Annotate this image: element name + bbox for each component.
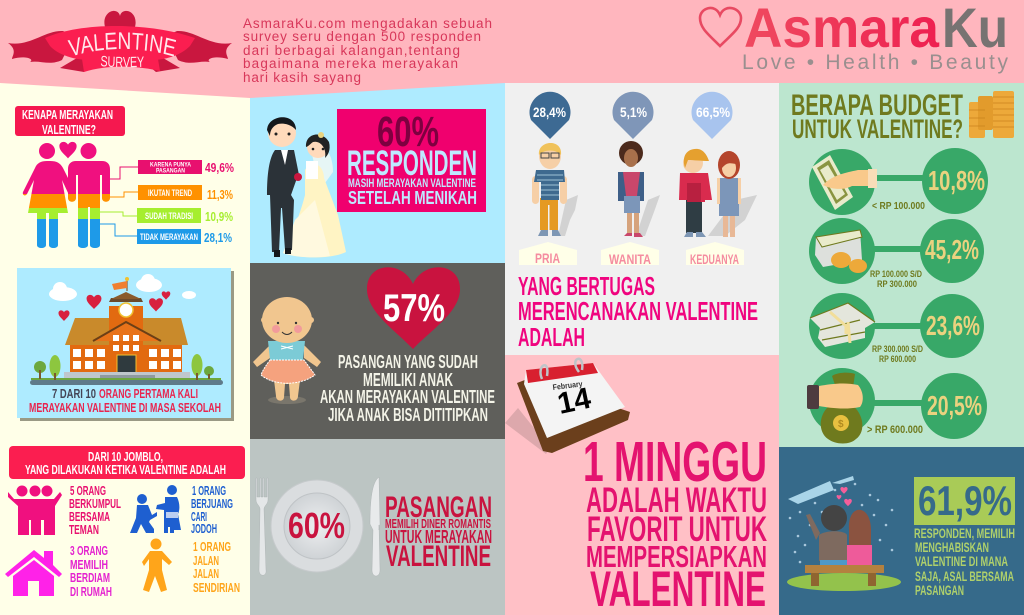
- pin: 28,4: [530, 92, 570, 139]
- heading: yang bertugas: YANG BERTUGAS: [518, 271, 655, 301]
- section: kenapa merayakan: VALENTINE?: [42, 122, 96, 137]
- panel: navy couple: [779, 447, 1024, 615]
- text: pasangan diner: MEMILIH DINER ROMANTIS: [385, 517, 491, 531]
- illustration: plate and cutlery: [256, 477, 380, 576]
- text: 1 orang berjuang: CARI: [191, 509, 207, 524]
- icon: calendar: 14: [555, 382, 594, 421]
- section: kenapa merayakan: KENAPA MERAYAKAN: [22, 107, 113, 122]
- icon: clouds: [49, 274, 196, 301]
- intro text: bagaimana mereka merayakan: [243, 56, 458, 71]
- row: budget 45,2: RP 300.000: [877, 279, 917, 290]
- pin: 28,4: 28,4%: [533, 104, 566, 120]
- text: responden memilih: PASANGAN: [915, 582, 964, 598]
- text: 1 minggu: [583, 430, 767, 615]
- illustration: wedding couple: [267, 117, 346, 257]
- text: 5 orang: 5 ORANG: [70, 483, 106, 498]
- pin: 66,5: 66,5%: [696, 104, 730, 120]
- illustration: plate and cutlery: 60%: [288, 505, 345, 546]
- text: pasangan yang sudah: [320, 352, 495, 425]
- text: responden memilih: [914, 525, 1015, 598]
- bar: karena punya pasangan: KARENA PUNYA: [150, 162, 191, 168]
- text: 5 orang: TEMAN: [69, 522, 99, 537]
- text: 1 orang jalan: 1 ORANG: [193, 539, 231, 554]
- bar: karena punya pasangan: PASANGAN: [156, 168, 185, 174]
- icon: fork: [256, 478, 268, 575]
- panel: planner light grey: [505, 83, 779, 355]
- illustration: baby: [253, 297, 321, 404]
- bar: sudah tradisi: 10,9%: [205, 209, 233, 224]
- label: keduanya: [686, 242, 744, 267]
- heading: yang bertugas: MERENCANAKAN VALENTINE: [518, 296, 758, 326]
- heading box: [15, 106, 125, 136]
- label: keduanya: KEDUANYA: [690, 251, 739, 267]
- panel: children dark grey: [250, 263, 505, 439]
- text: 3 orang: BERDIAM: [70, 570, 110, 585]
- callout: 57 percent heart: 57%: [383, 287, 445, 330]
- icon: school building: [30, 277, 223, 385]
- panel: header: [0, 0, 1024, 98]
- panel: budget green: [779, 83, 1024, 447]
- icon: friends: [8, 486, 62, 535]
- text: pasangan yang sudah: PASANGAN YANG SUDAH: [338, 352, 478, 372]
- label: pria: [519, 242, 577, 266]
- row: budget 10,8: 10,8%: [928, 165, 985, 196]
- icon: coins: [969, 91, 1014, 138]
- bar: tidak merayakan: [137, 229, 232, 245]
- row: budget 45,2: 45,2%: [925, 234, 979, 265]
- banner plane: [788, 481, 834, 504]
- intro text: AsmaraKu.com mengadakan sebuah: [243, 16, 492, 31]
- text: pasangan diner: PASANGAN: [385, 491, 492, 524]
- row: budget 10,8: < RP 100.000: [872, 201, 925, 212]
- intro text: hari kasih sayang: [243, 70, 361, 85]
- text: 3 orang: 3 ORANG: [70, 543, 108, 558]
- row: budget 45,2: RP 100.000 S/D: [870, 269, 922, 280]
- text: 1 minggu: MEMPERSIAPKAN: [586, 539, 767, 574]
- callout: 60 percent responden: RESPONDEN: [347, 144, 477, 183]
- stars: [789, 483, 893, 563]
- callout: 60 percent responden: MASIH MERAYAKAN VALENTINE: [348, 176, 476, 190]
- bar: karena punya pasangan: 49,6%: [205, 160, 234, 175]
- icon: logo heart: [700, 8, 741, 46]
- icon: calendar: February: [552, 379, 583, 392]
- panel: dinner light grey: [250, 439, 505, 615]
- card: school: [17, 268, 234, 421]
- panel: left cream column: [0, 83, 250, 615]
- icon: proposing couple: [130, 485, 181, 533]
- row: budget 23,6: [809, 293, 984, 365]
- row: budget 45,2: [809, 218, 984, 290]
- text: 1 orang berjuang: JODOH: [191, 521, 217, 536]
- callout: 60 percent responden: 60%: [377, 108, 439, 156]
- bar: sudah tradisi: SUDAH TRADISI: [145, 211, 193, 221]
- text: pasangan diner: [385, 491, 492, 573]
- heading: yang bertugas: ADALAH: [518, 322, 585, 352]
- bar: ikutan trend: [138, 185, 233, 202]
- bar: ikutan trend: 11,3%: [207, 187, 233, 202]
- text: 1 orang berjuang: [191, 483, 233, 536]
- icon: couple rainbow: [22, 142, 110, 248]
- section: jomblo: YANG DILAKUKAN KETIKA VALENTINE ADALAH: [25, 462, 226, 477]
- card: school: ORANG PERTAMA KALI: [99, 386, 198, 401]
- text: 3 orang: DI RUMAH: [70, 584, 112, 599]
- text: 1 orang jalan: JALAN: [193, 553, 219, 568]
- ribbon subtitle: SURVEY: [100, 56, 144, 68]
- ribbon title: VALENTINE: [68, 32, 176, 56]
- ribbon: valentine survey: [8, 10, 232, 72]
- text: 1 orang jalan: SENDIRIAN: [193, 580, 240, 595]
- text: 1 orang berjuang: 1 ORANG: [192, 483, 226, 498]
- intro text: dari berbagai kalangan,tentang: [243, 43, 460, 58]
- row: budget 23,6: RP 600.000: [879, 354, 916, 365]
- figure: woman: [618, 141, 660, 237]
- figure: couple: [679, 149, 757, 237]
- panel: wedding blue: [250, 83, 505, 263]
- text: pasangan diner: VALENTINE: [386, 540, 491, 573]
- text: 5 orang: [69, 483, 121, 537]
- logo: AsmaraKu: Love • Health • Beauty: [742, 51, 1008, 74]
- text: 1 minggu: ADALAH WAKTU: [586, 481, 767, 520]
- text: 1 minggu: FAVORIT UNTUK: [587, 510, 767, 549]
- callout: 60 percent responden: SETELAH MENIKAH: [348, 188, 477, 208]
- row: budget 23,6: RP 300.000 S/D: [872, 344, 923, 355]
- text: pasangan yang sudah: MEMILIKI ANAK: [363, 370, 453, 390]
- icon: trees: [34, 354, 214, 380]
- caption: 7 DARI 10: [52, 386, 96, 401]
- icon: hearts: [58, 291, 170, 321]
- text: 3 orang: [70, 543, 112, 599]
- row: budget 10,8: [809, 148, 988, 215]
- bar: tidak merayakan: TIDAK MERAYAKAN: [140, 232, 198, 242]
- bar: sudah tradisi: [137, 208, 233, 224]
- icon: calendar: [505, 359, 630, 454]
- text: pasangan diner: UNTUK MERAYAKAN: [385, 527, 492, 547]
- text: 5 orang: BERKUMPUL: [69, 496, 121, 511]
- section: kenapa merayakan: [15, 106, 234, 251]
- bar: tidak merayakan: 28,1%: [204, 230, 232, 245]
- heading box: [9, 446, 245, 479]
- text: 1 orang jalan: JALAN: [193, 566, 219, 581]
- intro text: [243, 16, 492, 85]
- logo: AsmaraKu: [700, 0, 1008, 74]
- row: budget 20,5: $: [838, 419, 844, 430]
- text: 1 orang jalan: [193, 539, 240, 595]
- heading: yang bertugas: [518, 271, 758, 352]
- icon: knife: [370, 477, 380, 576]
- text: 1 orang berjuang: BERJUANG: [191, 496, 233, 511]
- row: budget 20,5: > RP 600.000: [867, 424, 923, 436]
- label: pria: PRIA: [535, 250, 560, 266]
- icon: house: [5, 550, 62, 596]
- bar: karena punya pasangan: [138, 160, 234, 175]
- pin: 5,1: 5,1%: [620, 104, 647, 120]
- row: budget 20,5: [807, 368, 987, 444]
- text: 5 orang: BERSAMA: [69, 509, 110, 524]
- label: wanita: WANITA: [609, 251, 651, 267]
- pin: 66,5: [692, 92, 732, 139]
- text: pasangan yang sudah: JIKA ANAK BISA DITITIPKAN: [328, 405, 488, 425]
- illustration: couple on bench: [787, 476, 901, 591]
- pin: 5,1: [612, 92, 653, 139]
- bar: ikutan trend: IKUTAN TREND: [148, 188, 192, 198]
- row: budget 23,6: 23,6%: [926, 310, 980, 341]
- intro text: survey seru dengan 500 responden: [243, 29, 481, 44]
- text: pasangan yang sudah: AKAN MERAYAKAN VALENTINE: [320, 387, 495, 407]
- callout: 57 percent heart: [367, 267, 460, 349]
- row: budget 20,5: 20,5%: [927, 390, 982, 421]
- hearts: [837, 487, 852, 506]
- section: jomblo: DARI 10 JOMBLO,: [88, 449, 163, 464]
- label: wanita: [601, 242, 659, 267]
- section: jomblo: [5, 446, 245, 599]
- heading: berapa budget: [791, 89, 963, 144]
- card: school: MERAYAKAN VALENTINE DI MASA SEKOLAH: [29, 400, 221, 415]
- figure: man: [532, 143, 578, 236]
- icon: walking person: [142, 538, 172, 592]
- text: 3 orang: MEMILIH: [70, 557, 108, 572]
- callout: 60 percent responden: [337, 108, 486, 212]
- panel: one week pink: [505, 355, 779, 615]
- text: 1 minggu: 1 MINGGU: [583, 430, 767, 494]
